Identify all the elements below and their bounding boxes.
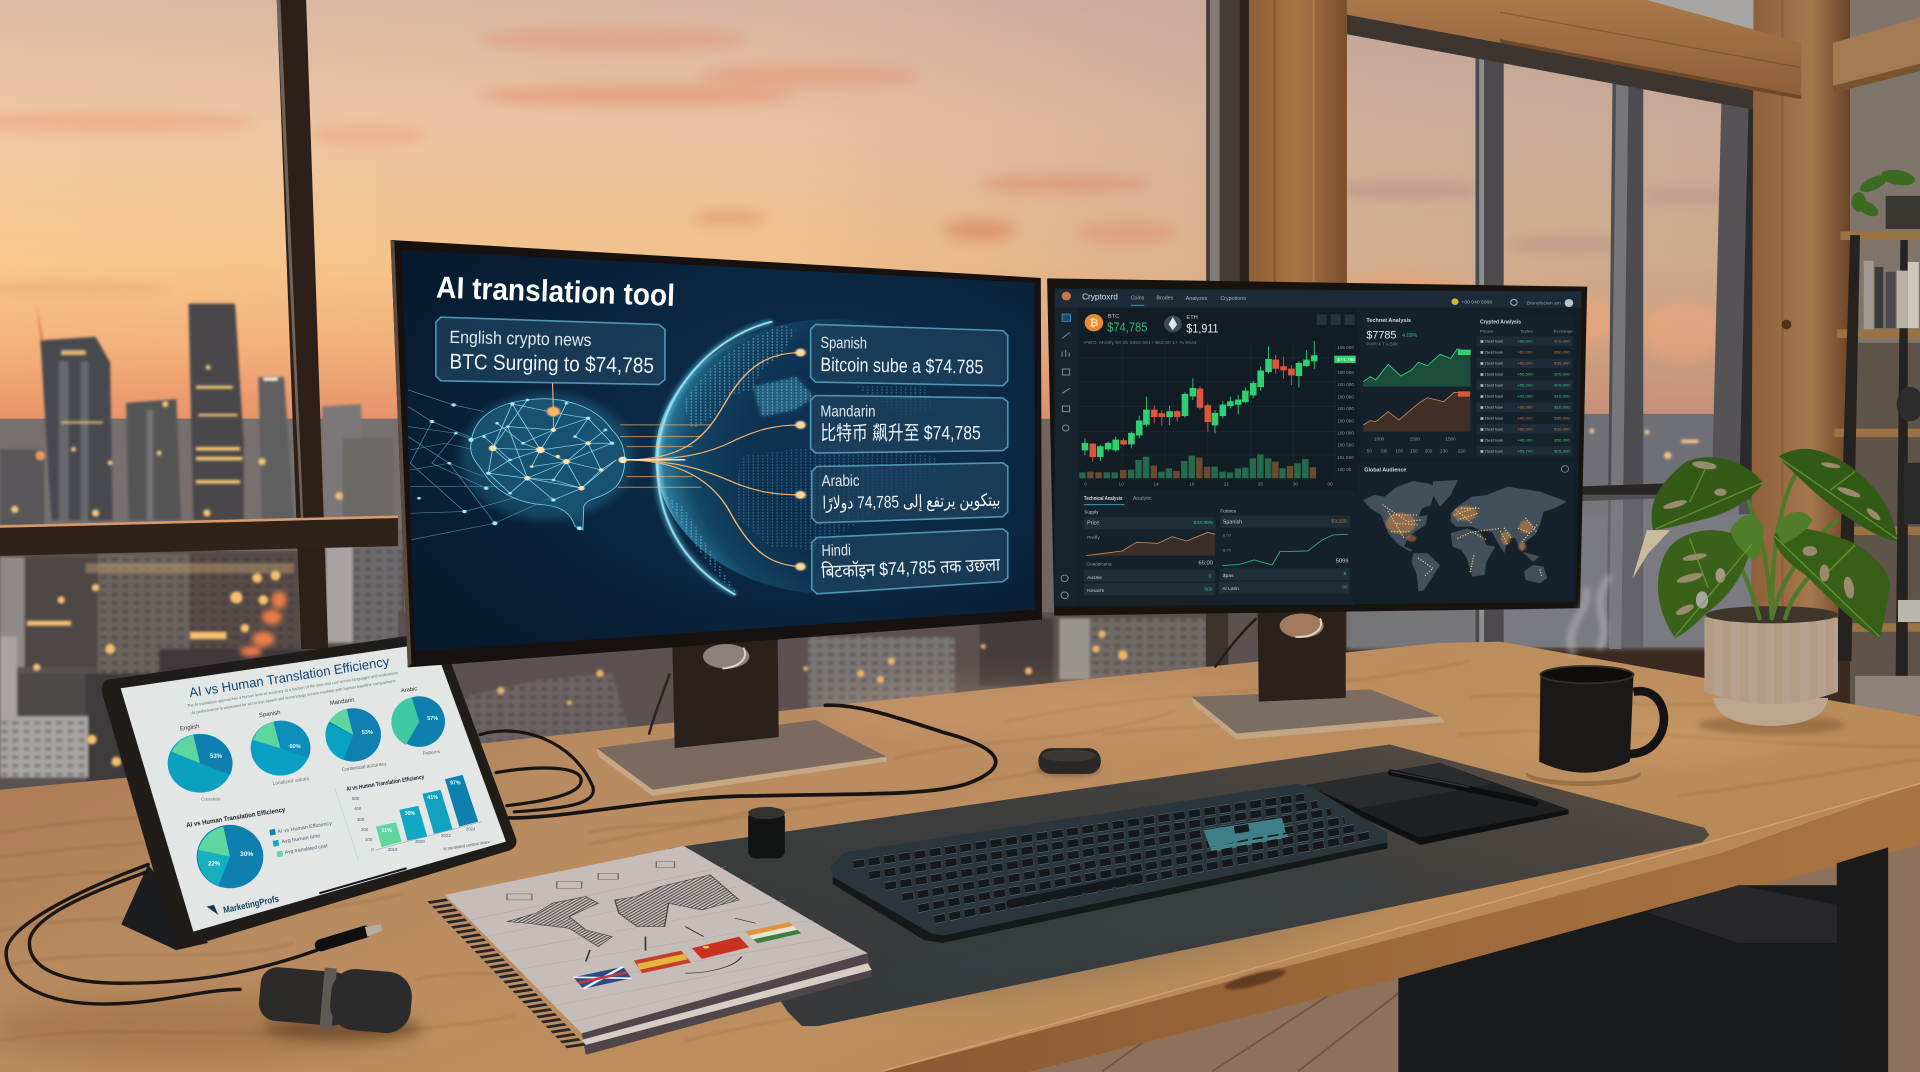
bottom analytics panel: Aussie (1087, 575, 1102, 581)
bar chart: 0 (371, 847, 374, 852)
bottom analytics panel (1078, 491, 1355, 605)
notebook spiral (437, 900, 578, 1048)
efficiency pie: 30% (240, 851, 253, 858)
brain network (417, 383, 634, 530)
price axis: 100 00 (1337, 467, 1352, 472)
crypto table panel: +50,000 (1517, 426, 1533, 431)
crypto table panel: ▣ Dest loan (1480, 394, 1504, 399)
panel: left monitor screen (402, 250, 1035, 651)
crypto table panel: $30,000 (1554, 426, 1570, 431)
pie: English: English (180, 724, 200, 733)
notebook ruled lines (470, 867, 864, 1023)
price axis: 100 000 (1337, 431, 1354, 436)
sidebar icons (1055, 308, 1077, 606)
window frames left (0, 0, 1251, 704)
crypto table panel: +45,000 (1517, 437, 1533, 442)
callout: Spanish: Spanish (820, 335, 867, 353)
callout: Mandarin: Mandarin (820, 403, 876, 420)
ceiling beam (1347, 0, 1801, 99)
crypto table panel: $70,000 (1554, 339, 1570, 344)
technical analysis panel: 230 (1440, 449, 1448, 454)
BTC ticker: BTC (1108, 314, 1119, 320)
top navigation: Cryptoxrd (1082, 292, 1118, 301)
crypto table panel: +53,700 (1517, 448, 1533, 453)
key rows (853, 797, 1371, 920)
notebook map sketch (507, 875, 739, 947)
crypto table panel: Phrase (1480, 328, 1494, 333)
crypto table panel: ▣ Dest loan (1480, 415, 1504, 420)
dashboard background (1054, 288, 1582, 607)
pie: English: Coastals (201, 797, 221, 803)
tablet intro text: AI performance is assessed for accuracy, speed and terminology across markets with human baseline comparisons (191, 678, 396, 715)
green candles (1082, 341, 1317, 461)
crypto table panel: +60,000 (1517, 350, 1533, 355)
city skyline left (0, 304, 1224, 749)
bar chart heading: AI vs Human Translation Efficiency (346, 775, 425, 793)
callout: Mandarin (811, 395, 1008, 453)
bar chart: 11% (381, 828, 392, 834)
microphone (257, 961, 422, 1041)
mouse pad mat (669, 744, 1709, 1027)
crypto table panel: Crypted Analysis (1480, 319, 1521, 325)
bar chart: 300 (357, 817, 365, 822)
bottom analytics panel: Kewal's (1087, 588, 1105, 594)
bottom analytics panel: 0 (1209, 574, 1212, 580)
tablet cover stand (121, 864, 208, 950)
top navigation: Bianolocian am (1527, 300, 1561, 306)
space bar (1010, 878, 1139, 904)
crypto table panel: +60,000 (1517, 361, 1533, 366)
technical analysis panel: 4.09% (1402, 333, 1418, 339)
pie: Arabic (391, 686, 445, 756)
technical analysis panel (1361, 312, 1474, 458)
main candlestick panel: $74,785 (1337, 357, 1356, 363)
pie: Spanish: Spanish (259, 710, 281, 719)
crypto table panel: $70,000 (1554, 372, 1570, 377)
bar chart: 41% (427, 795, 438, 801)
bottom analytics panel: $33,30% (1194, 520, 1214, 526)
network lines left (408, 390, 553, 540)
crypto table panel: +40,000 (1517, 415, 1533, 420)
callout: English source: BTC Surging to $74,785 (449, 350, 654, 378)
pie: Mandarin (325, 698, 387, 773)
callout: Hindi: बिटकॉइन $74,785 तक उछला (821, 553, 1001, 582)
ETH ticker: ETH (1186, 315, 1198, 321)
price axis: 100 000 (1337, 406, 1354, 411)
pie: Spanish (251, 710, 310, 787)
marketing logo: MarketingProfs (222, 894, 280, 915)
small desk pad with pen (1305, 763, 1569, 845)
right window panes city haze (1347, 414, 1763, 649)
bottom analytics panel: Price (1087, 521, 1099, 527)
price axis: 100 000 (1337, 418, 1354, 423)
price axis: 6 (1084, 482, 1087, 487)
crypto table panel: +45,000 (1517, 394, 1533, 399)
pie: Arabic: 57% (427, 716, 438, 722)
main candlestick panel (1079, 308, 1357, 488)
technical analysis panel: 5th (1381, 449, 1388, 454)
notebook (437, 846, 872, 1055)
notebook sketch boxes (507, 862, 674, 900)
crypto table panel: ▣ Dest loan (1480, 448, 1504, 453)
translation lines (618, 353, 801, 567)
bar chart: 2022 (441, 833, 451, 838)
monstera leaves (1632, 449, 1897, 638)
pie: Arabic: Patterns (423, 749, 441, 756)
crypto table panel: ▣ Dest loan (1480, 405, 1504, 410)
right window mullions (1344, 0, 1801, 649)
tablet (102, 632, 516, 948)
shelf boards (1834, 231, 1920, 632)
volume bars (1079, 454, 1309, 478)
pie: Spanish: Localized values (272, 776, 310, 787)
crypto table panel (1476, 314, 1574, 458)
plant stems (1739, 463, 1837, 618)
crypto table panel: ▣ Dest loan (1480, 350, 1504, 355)
bar chart: 500 (352, 796, 360, 801)
crypto table panel: $50,000 (1554, 415, 1570, 420)
price axis: 21 (1224, 482, 1230, 487)
clouds (0, 27, 1739, 360)
crypto table panel: +50,000 (1517, 339, 1533, 344)
callout: Spanish: Bitcoin sube a $74.785 (820, 354, 984, 379)
under desk cabinet and leg (1398, 847, 1888, 1072)
efficiency legend: Avg human time (281, 833, 321, 845)
bookshelf wall (1833, 0, 1920, 735)
crypto table panel: ▣ Dest loan (1480, 426, 1504, 431)
pie: Mandarin: 53% (362, 730, 373, 736)
coffee mug (1526, 666, 1664, 786)
technical analysis panel: 1000 (1374, 437, 1385, 442)
price axis: 100 000 (1337, 370, 1354, 375)
crypto table panel: $50,000 (1554, 437, 1570, 442)
right monitor stand (649, 606, 1445, 740)
price axis: 00 (1327, 482, 1333, 487)
flag: Spain (634, 951, 691, 973)
bottom analytics panel: 5099 (1336, 558, 1348, 564)
global audience map (1358, 462, 1574, 600)
callout: Arabic: Arabic (822, 473, 860, 490)
home indicator (319, 868, 407, 893)
crypto table panel: ▣ Dest loan (1480, 361, 1504, 366)
bar chart: 2024 (466, 827, 476, 832)
top navigation: Crypotions (1220, 296, 1246, 302)
top navigation (1055, 289, 1581, 308)
city visible between and under monitors (398, 606, 1494, 749)
crypto table panel: $10,000 (1554, 394, 1570, 399)
bar chart: 200 (361, 827, 369, 832)
pie: English: 53% (210, 754, 223, 760)
technical analysis panel: 1500 (1410, 437, 1420, 442)
technical analysis panel: 50 (1367, 449, 1372, 454)
desk top (0, 642, 1920, 1072)
callout: Hindi (812, 529, 1008, 594)
technical analysis panel: 1500 (1445, 437, 1456, 442)
bottom analytics panel: 8.00 (1223, 533, 1232, 538)
globe (651, 318, 936, 598)
price axis: 16 (1189, 482, 1195, 487)
tablet body (102, 632, 516, 948)
price axis: 14 (1154, 482, 1159, 487)
crypto table panel: $50,000 (1554, 350, 1570, 355)
BTC ticker: $74,785 (1107, 320, 1147, 335)
tablet title: AI vs Human Translation Efficiency (188, 654, 391, 700)
books (1864, 261, 1920, 622)
price axis: 25 (1258, 482, 1264, 487)
small cylinder holder (748, 807, 785, 858)
desk front edge (882, 784, 1920, 1072)
bar chart: % translated content share (443, 839, 491, 852)
efficiency pie: 22% (208, 862, 221, 868)
top navigation: Brodes (1156, 295, 1174, 301)
price axis: 100 500 (1337, 443, 1354, 448)
tablet screen (121, 643, 506, 932)
technical analysis panel: 150 (1410, 449, 1418, 454)
bottom analytics panel: Futures (1220, 508, 1237, 513)
price axis: 10 (1119, 482, 1124, 487)
bottom analytics panel: Supply (1084, 510, 1099, 515)
top navigation: +00 040 5066 (1461, 300, 1492, 306)
technical analysis panel: 200 (1425, 449, 1433, 454)
window lights upper city (11, 350, 343, 517)
technical analysis panel: 220 (1458, 449, 1466, 454)
pie: English (168, 724, 232, 803)
bottom analytics panel: 8.70 (1223, 548, 1232, 553)
pie: Spanish: 60% (289, 744, 301, 750)
crypto table panel: $70,000 (1554, 383, 1570, 388)
efficiency legend (269, 821, 333, 857)
price axis: 100 000 (1337, 394, 1354, 399)
ETH ticker: $1,911 (1186, 322, 1219, 335)
price axis: 105 000 (1337, 345, 1354, 350)
technical analysis panel: $7785 (1366, 329, 1397, 341)
leaf top right (1778, 449, 1897, 541)
cables tablet and microphone (6, 864, 317, 1004)
marketing logo (207, 894, 280, 915)
bottom analytics panel: 8 (1344, 571, 1347, 577)
bar chart (335, 775, 491, 860)
callout: Arabic: بيتكوين يرتفع إلى 74,785 دولارًا (822, 491, 1001, 514)
leaf bottom left (1658, 530, 1752, 638)
tablet intro text: The AI translation approaches a human level of accuracy at a fraction of the time and cost across languages and evaluations (187, 670, 398, 708)
wooden post centre (1249, 0, 1347, 294)
crypto table panel: $35,000 (1554, 361, 1570, 366)
technical analysis panel: PAIR 4 T A.50K (1366, 342, 1398, 347)
callout: English source: English crypto news (449, 327, 592, 350)
leaf bottom right (1773, 528, 1890, 638)
bottom analytics panel: 00 (1342, 584, 1348, 590)
floor (857, 845, 1920, 1072)
plant pot (1698, 606, 1845, 735)
monitor 2 bezel (1047, 278, 1587, 616)
flag: UK (573, 967, 631, 989)
left monitor stand (596, 634, 887, 796)
crypto table panel: Exchange (1554, 328, 1573, 333)
ETH ticker (1164, 315, 1219, 335)
leaf holes and veins (1662, 460, 1882, 617)
bottom analytics panel: Al Latin (1222, 586, 1239, 592)
crypto table panel: $75,000 (1554, 448, 1570, 453)
bottom analytics panel: $pas (1223, 573, 1234, 579)
crypto table panel: $10,000 (1554, 405, 1570, 410)
BTC ticker: ₿ (1090, 317, 1098, 329)
callout: Hindi: Hindi (821, 542, 851, 560)
efficiency legend: Avg translated cost (284, 843, 329, 856)
bar chart: 97% (450, 781, 461, 787)
efficiency pie heading: AI vs Human Translation Efficiency (186, 807, 286, 829)
crypto table panel: ▣ Dest loan (1480, 437, 1504, 442)
panel: right monitor dashboard (1047, 278, 1587, 616)
sky background (0, 0, 1920, 422)
top navigation: Analyzes (1186, 296, 1208, 302)
usb plug (321, 924, 382, 945)
notebook arrows (586, 918, 756, 973)
bar chart: 2019 (388, 847, 398, 852)
callout: Spanish (811, 324, 1008, 386)
crypto table panel: +55,000 (1517, 383, 1533, 388)
efficiency legend: AI vs Human Efficiency (277, 821, 333, 835)
steam (1571, 575, 1610, 655)
callout: Arabic (812, 463, 1008, 523)
technical analysis panel: 100 (1395, 449, 1404, 454)
bottom analytics panel: Analytic (1133, 496, 1152, 502)
pie: Mandarin: Contextual accuracy (341, 761, 387, 773)
crypto table panel: ▣ Dest loan (1480, 383, 1504, 388)
crypto table panel: ▣ Dest loan (1480, 372, 1504, 377)
bar chart: 30% (405, 811, 416, 817)
crypto table panel: +50,500 (1517, 372, 1533, 377)
bottom analytics panel: 500 (1204, 587, 1213, 593)
crypto table panel: Tested (1520, 328, 1533, 333)
price axis: 30 (1293, 482, 1299, 487)
bar chart: 400 (354, 806, 362, 811)
price axis: 101 500 (1337, 455, 1354, 460)
technical analysis panel: Technet Analysis (1366, 318, 1411, 324)
bottom analytics panel: Prefly (1087, 535, 1100, 541)
crypto table panel: +50,000 (1517, 405, 1533, 410)
callout: Mandarin: 比特币 飙升至 $74,785 (820, 423, 981, 445)
leaf middle (1730, 515, 1763, 561)
bottom analytics panel: Guadalcana (1086, 562, 1112, 567)
leaf top left (1652, 457, 1763, 530)
callout: English source (436, 317, 665, 384)
pie: Mandarin: Mandarin (329, 698, 355, 707)
small shelf plant (1851, 167, 1920, 229)
bottom analytics panel: $3,220 (1331, 519, 1347, 525)
price axis: 100 000 (1337, 382, 1354, 387)
city lower left with bokeh lights (0, 545, 404, 796)
flag: China (692, 937, 749, 959)
wooden post right (1751, 0, 1850, 661)
bar chart: 2020 (415, 839, 425, 844)
bottom analytics panel: Technical Analysis (1084, 496, 1123, 502)
efficiency pie (197, 825, 263, 888)
cables back (480, 705, 996, 818)
price axis (1084, 345, 1354, 487)
flag: India (746, 922, 801, 943)
global audience map: Global Audience (1364, 467, 1407, 473)
round puck (1037, 748, 1101, 776)
crypto table panel: ▣ Dest loan (1480, 339, 1504, 344)
bottom analytics panel: Spanish (1223, 519, 1242, 525)
red candles (1090, 355, 1294, 462)
left monitor bezel (391, 240, 1042, 667)
main candlestick panel: PWO. Mostly 50.85 5654,561+ $52.50 1+ % 5644 (1084, 340, 1197, 346)
bar chart: 100 (365, 837, 373, 842)
key backlight (853, 797, 1371, 920)
bottom analytics panel: 65:00 (1199, 560, 1213, 566)
BTC ticker (1085, 314, 1147, 335)
top navigation: Coins (1131, 295, 1145, 301)
keyboard (830, 784, 1387, 943)
heading: AI translation tool: AI translation tool (436, 271, 675, 313)
pie: Arabic: Arabic (401, 686, 418, 694)
